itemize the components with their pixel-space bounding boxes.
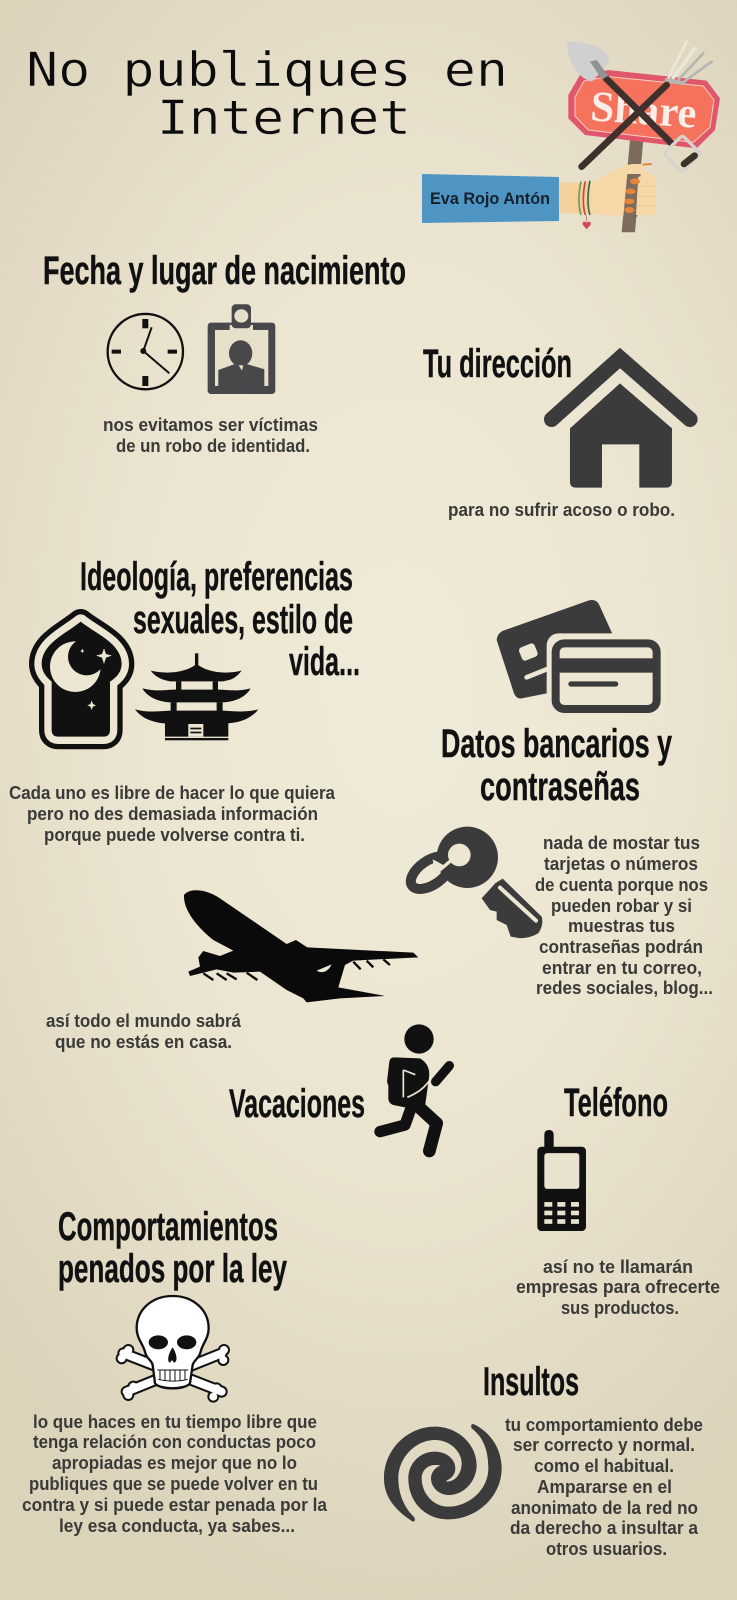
text: insultos: tu comportamiento debe [505,1415,703,1435]
text: comportamientos: publiques que se puede volver en tu [29,1474,318,1494]
text: dirección: para no sufrir acoso o robo. [448,500,675,520]
text: comportamientos: tenga relación con conductas poco [33,1432,316,1452]
text: comportamientos: apropiadas es mejor que no lo [52,1453,297,1473]
text: insultos: como el habitual. [534,1456,674,1476]
text: teléfono: empresas para ofrecerte [516,1277,720,1297]
icon: spiral [384,1424,502,1522]
icon: mobile phone [537,1130,586,1231]
heading: teléfono: Teléfono [564,1081,668,1125]
icon: key [405,827,542,938]
text: datos bancarios [535,833,713,998]
heading: comportamientos: penados por la ley [58,1247,287,1291]
text: identidad [103,415,318,456]
text: comportamientos: contra y si puede estar penada por la [22,1495,328,1515]
text: datos bancarios: tarjetas o números [544,854,698,874]
crossed handles [582,85,667,167]
text: ideología: Cada uno es libre de hacer lo que quiera [9,783,336,803]
text: insultos: ser correcto y normal. [513,1435,695,1455]
title: Internet [157,91,411,146]
icon: airplane [184,890,418,1002]
text: insultos: Ampararse en el [537,1477,672,1497]
sign board: Share [589,82,698,138]
heading: comportamientos [58,1205,287,1291]
heading: ideología [80,555,360,684]
title: No publiques en [26,43,508,98]
post [622,140,643,232]
text: identidad: nos evitamos ser víctimas [103,415,318,435]
hand [559,164,656,229]
heading: ideología: vida... [289,640,360,684]
icon: house [552,358,690,488]
text: comportamientos [22,1412,328,1536]
heading: comportamientos: Comportamientos [58,1205,278,1249]
icon: clock [108,314,183,389]
author label [422,174,559,223]
text: identidad: de un robo de identidad. [116,436,310,456]
text: vacaciones: que no estás en casa. [55,1032,232,1052]
shovel blade [567,42,609,82]
heading: insultos: Insultos [483,1360,579,1404]
text: vacaciones [46,1011,242,1052]
text: datos bancarios: de cuenta porque nos [535,875,708,895]
text: ideología [9,783,336,845]
icon: skull and crossbones [117,1296,229,1402]
heading: tu dirección: Tu dirección [423,342,572,386]
text: vacaciones: así todo el mundo sabrá [46,1011,242,1031]
illustration: share sign crossed out, held by hand [559,42,720,232]
text: datos bancarios: pueden robar y si [551,896,692,916]
icon: id badge [208,304,275,394]
handle grip [664,135,701,172]
text: insultos: otros usuarios. [546,1539,667,1559]
text: datos bancarios: nada de mostar tus [543,833,700,853]
text: teléfono: sus productos. [561,1298,679,1318]
heading: fecha y lugar de nacimiento: Fecha y lugar de nacimiento [43,249,406,293]
text: insultos: da derecho a insultar a [510,1518,699,1538]
text: teléfono: así no te llamarán [543,1257,693,1277]
text: ideología: pero no des demasiada información [27,804,318,824]
icon: pagoda [135,653,258,740]
heading: ideología: sexuales, estilo de [133,598,353,642]
text: comportamientos: ley esa conducta, ya sabes... [59,1516,295,1536]
heading: ideología: Ideología, preferencias [80,555,353,599]
fork [667,42,712,83]
heading: vacaciones: Vacaciones [229,1082,365,1126]
text: comportamientos: lo que haces en tu tiempo libre que [33,1412,317,1432]
text: datos bancarios: muestras tus [568,916,675,936]
text: teléfono [516,1257,720,1318]
icon: runner with backpack [380,1024,449,1151]
icon: mosque window with moon [42,622,122,737]
text: insultos [505,1415,703,1559]
text: datos bancarios: redes sociales, blog... [536,978,713,998]
title [26,43,508,146]
heading: datos bancarios [441,722,673,809]
text: datos bancarios: contraseñas podrán [539,937,703,957]
author label: Eva Rojo Antón [430,189,550,208]
text: insultos: anonimato de la red no [511,1498,698,1518]
text: ideología: porque puede volverse contra ti. [44,825,305,845]
icon: credit cards [497,600,667,718]
text: datos bancarios: entrar en tu correo, [542,958,702,978]
heading: datos bancarios: contraseñas [480,765,640,809]
sign board [568,70,720,148]
